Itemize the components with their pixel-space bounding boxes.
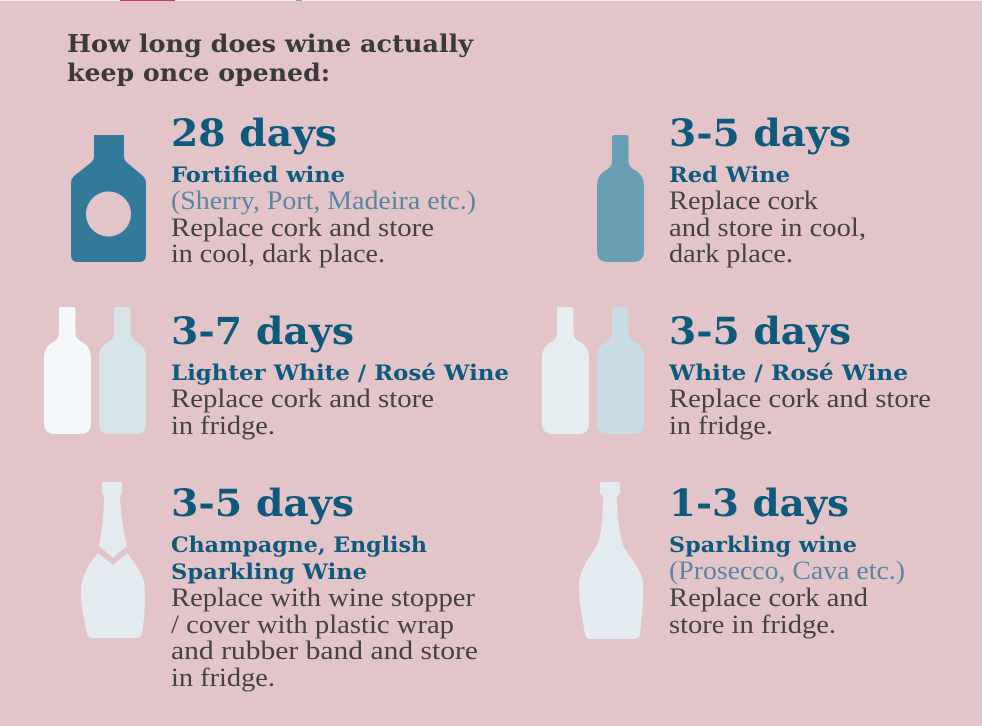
red wine description — [669, 162, 866, 268]
fortified wine description: in cool, dark place. — [171, 239, 385, 268]
panel: sparkling wine — [579, 481, 905, 639]
fortified wine description — [171, 162, 476, 268]
fortified wine description: Replace cork and store — [171, 213, 434, 242]
champagne description: Sparkling Wine — [171, 559, 367, 584]
red wine description: Replace cork — [669, 186, 818, 215]
white wine description: Replace cork and store — [669, 384, 931, 413]
champagne description: Replace with wine stopper — [171, 583, 475, 612]
fortified wine description: (Sherry, Port, Madeira etc.) — [171, 186, 476, 215]
days: 28 days: 28 days — [171, 111, 337, 155]
red wine description: Red Wine — [669, 162, 790, 187]
days: 3-5 days: 3-5 days — [669, 111, 851, 155]
days: 3-5 days: 3-5 days — [669, 309, 851, 353]
white wine description: White / Rosé Wine — [668, 360, 908, 385]
days: 1-3 days: 1-3 days — [669, 481, 849, 525]
title: keep once opened: — [67, 58, 330, 87]
title: How long does wine actually — [67, 29, 474, 58]
champagne description — [171, 532, 478, 692]
white wine description — [668, 360, 931, 440]
sparkling wine description: store in fridge. — [669, 610, 836, 639]
red wine description: dark place. — [669, 239, 793, 268]
icon: champagne bottle — [81, 482, 145, 638]
champagne description: in fridge. — [171, 663, 275, 692]
champagne description: / cover with plastic wrap — [171, 610, 454, 639]
icon: sparkling wine bottle — [579, 482, 643, 639]
icon: fortified wine bottle — [71, 135, 146, 262]
lighter white description — [171, 360, 509, 440]
red wine description: and store in cool, — [669, 213, 866, 242]
lighter white description: Lighter White / Rosé Wine — [171, 360, 509, 385]
champagne description: and rubber band and store — [171, 636, 478, 665]
panel: champagne — [81, 481, 478, 692]
sparkling wine description: Replace cork and — [669, 583, 868, 612]
white wine description: in fridge. — [669, 411, 773, 440]
fortified wine description: Fortified wine — [171, 162, 345, 187]
icon: lighter white and rosé bottles — [44, 307, 146, 434]
days: 3-7 days: 3-7 days — [171, 309, 354, 353]
days: 3-5 days: 3-5 days — [171, 481, 354, 525]
panel: fortified wine — [71, 111, 476, 268]
title — [67, 29, 474, 87]
panel: white / rosé wine — [542, 307, 931, 440]
lighter white description: Replace cork and store — [171, 384, 434, 413]
icon: red wine bottle — [597, 135, 644, 262]
lighter white description: in fridge. — [171, 411, 275, 440]
sparkling wine description: Sparkling wine — [669, 532, 857, 557]
champagne description: Champagne, English — [171, 532, 427, 557]
icon: white and rosé bottles — [542, 307, 644, 434]
sparkling wine description — [669, 532, 905, 639]
panel: red wine — [597, 111, 866, 268]
panel: lighter white / rosé wine — [44, 307, 509, 440]
sparkling wine description: (Prosecco, Cava etc.) — [669, 556, 905, 585]
